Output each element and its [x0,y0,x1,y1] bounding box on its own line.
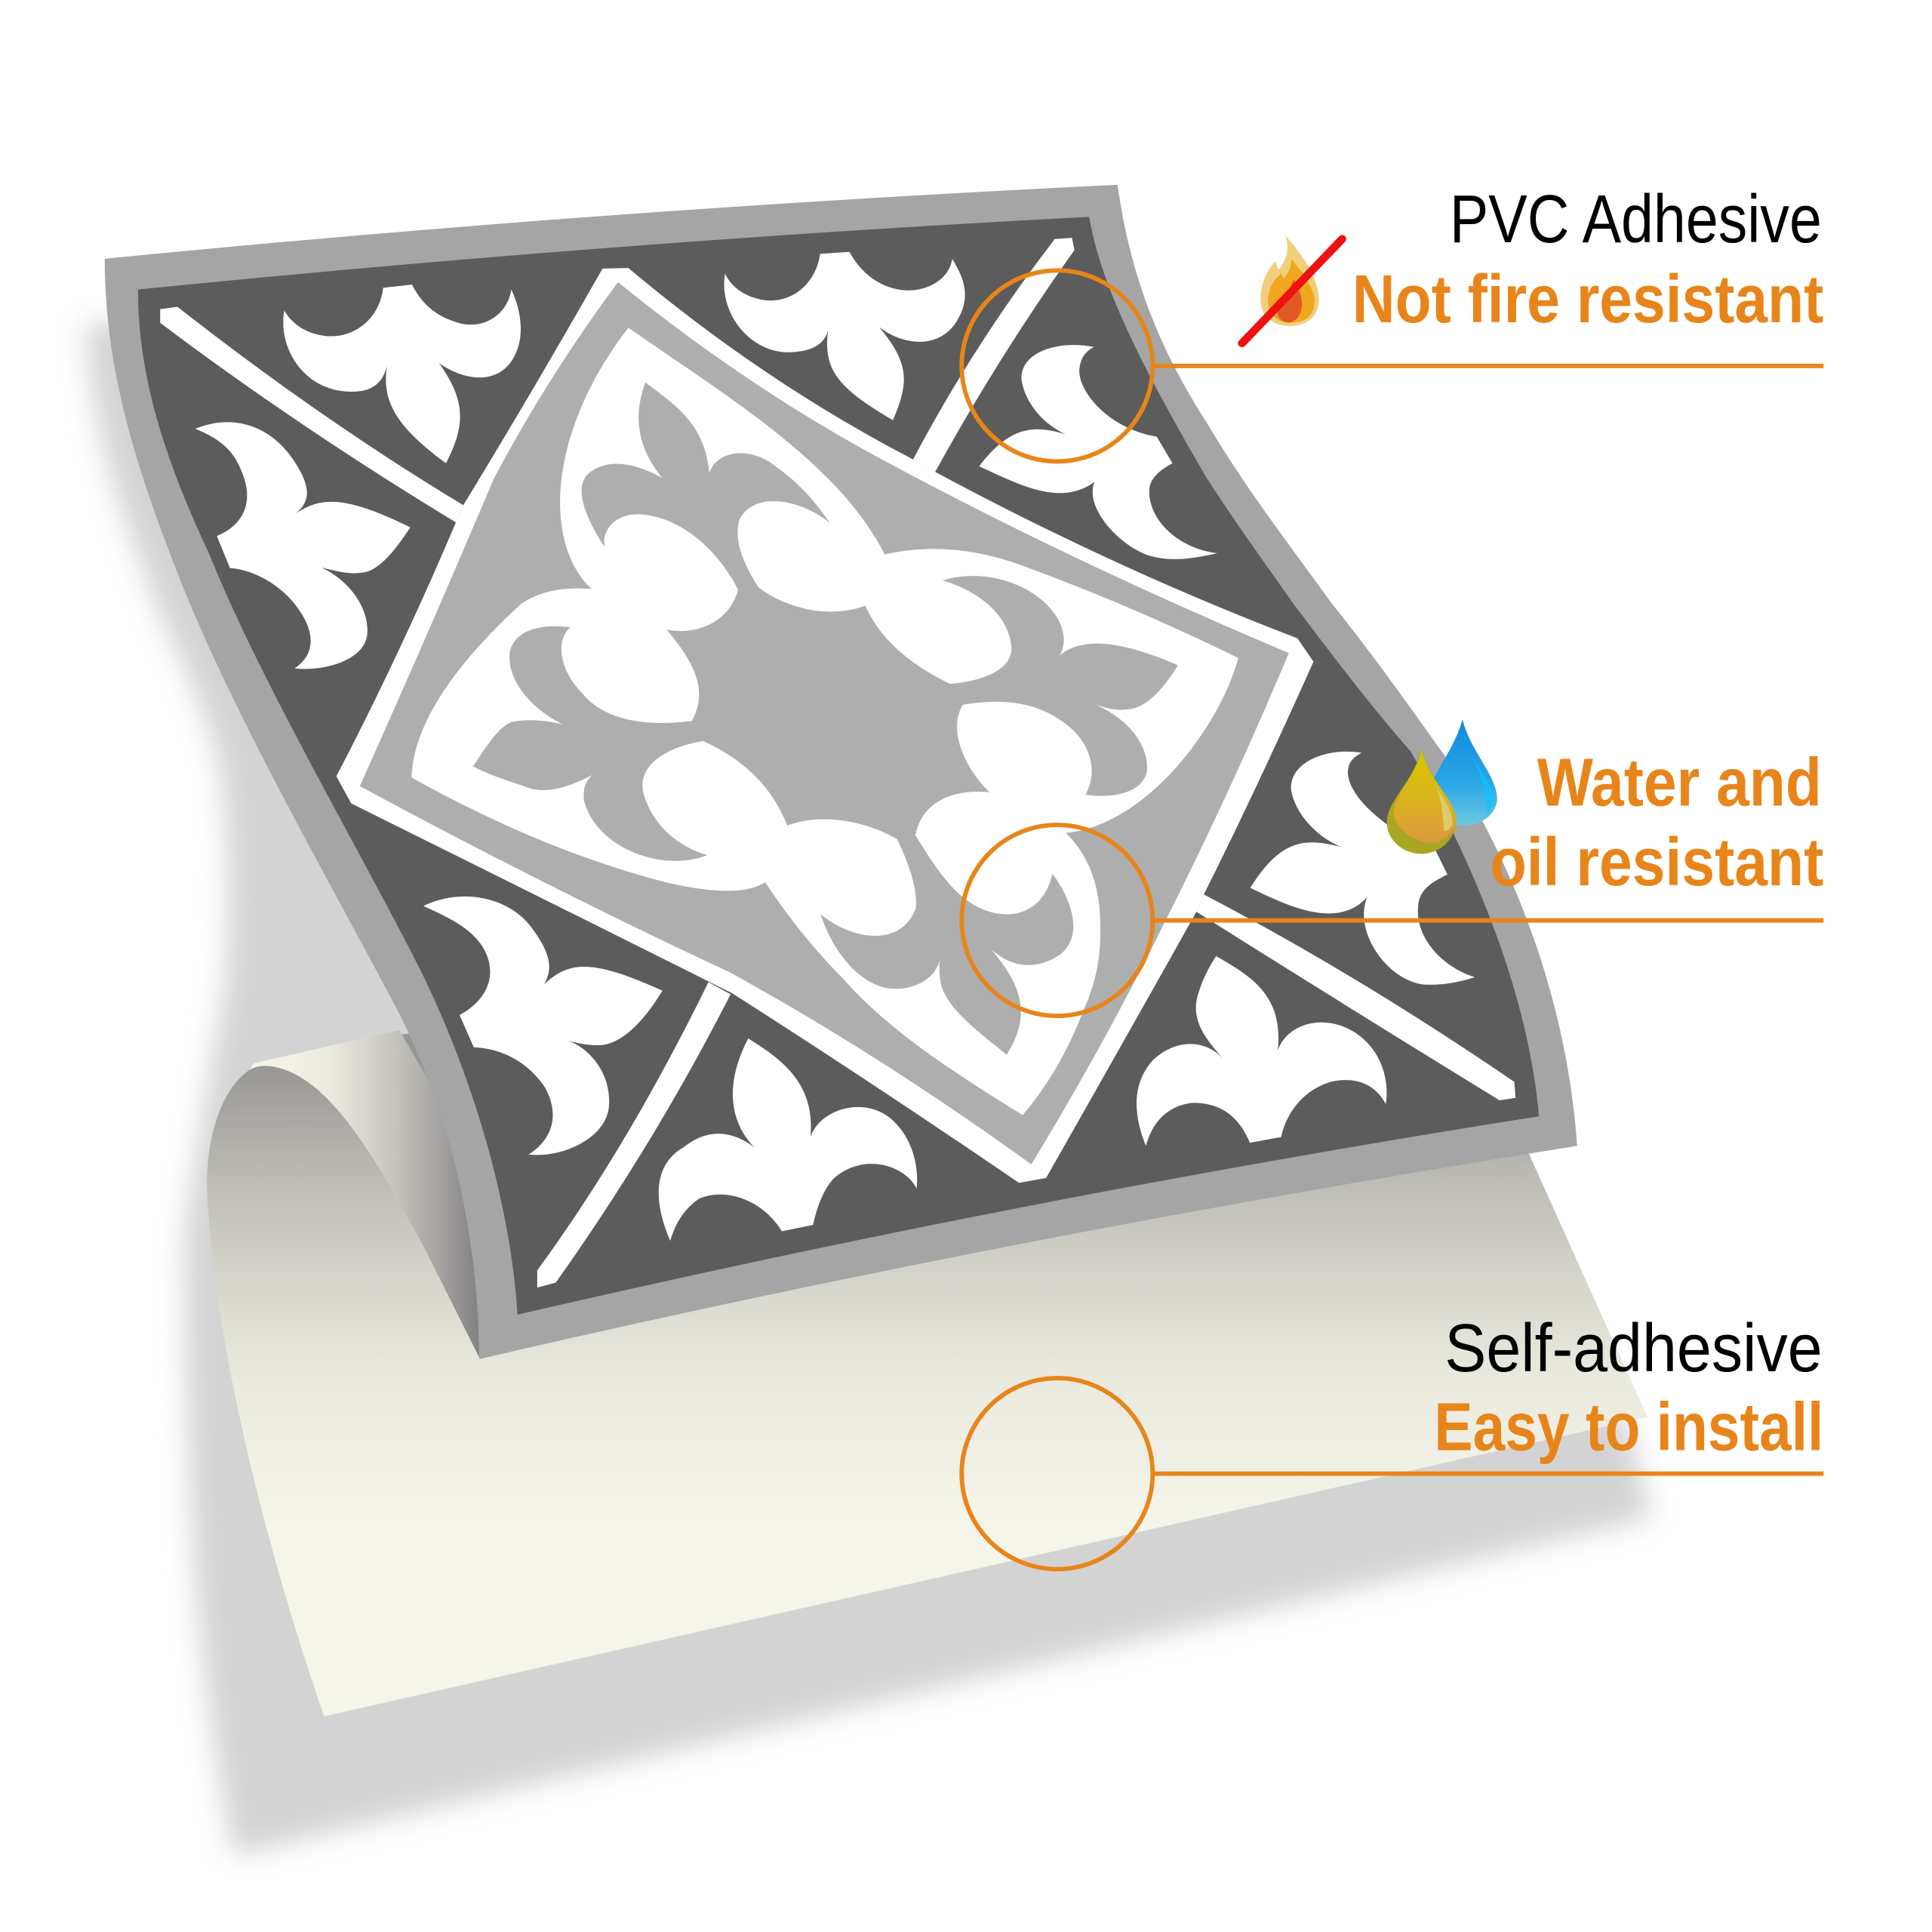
subheading: oil resistant: oil resistant [1491,825,1823,900]
callout circle [961,825,1152,1016]
subheading: Water and: Water and [1537,746,1822,821]
subheading: Easy to install: Easy to install [1434,1390,1823,1466]
white fleur: top right left of bar [724,252,965,420]
white fleur: bottom left upper [423,897,663,1155]
icon: water drop [1429,719,1497,826]
central grey fleur medallion [473,383,1178,1055]
white fleur: bottom [659,1038,917,1241]
vinyl tile [105,185,1577,1359]
drop shadow [86,323,1651,1856]
icon: oil drop [1387,749,1457,854]
icon: crossed-out flame [1242,235,1342,343]
diagonal bar: top right [913,238,1075,472]
leader line [1153,1472,1823,1476]
diagonal bar: top left [160,307,463,522]
white fleur: right upper [1251,752,1475,985]
heading: PVC Adhesive: PVC Adhesive [1450,182,1822,257]
backing sheet [207,986,1647,1716]
white fleur: top left upper [283,285,521,463]
callout circle [961,270,1152,461]
leader line [1153,918,1823,923]
callout: PVC adhesive, not fire resistant [961,182,1823,461]
curled back of sheet [250,1030,518,1359]
callout: water and oil resistant [961,719,1823,1016]
white fleur: top right of bar [979,345,1217,559]
callout circle [961,1378,1152,1569]
sheet front face [207,986,1647,1716]
diagonal bar: bottom left [537,982,731,1287]
white fleur: right lower [1137,956,1386,1146]
white fleur: top left lower [195,422,411,669]
subheading: Not fire resistant: Not fire resistant [1352,262,1823,337]
callout: self-adhesive, easy to install [961,1311,1823,1569]
tile outer border [105,185,1577,1359]
central white band [337,268,1313,1183]
heading: Self-adhesive: Self-adhesive [1444,1311,1823,1386]
tile dark field [138,217,1539,1315]
diagonal bar: bottom right [1196,894,1515,1100]
leader line [1153,364,1823,368]
inner white field [411,328,1238,1115]
central grey diamond [360,282,1289,1164]
